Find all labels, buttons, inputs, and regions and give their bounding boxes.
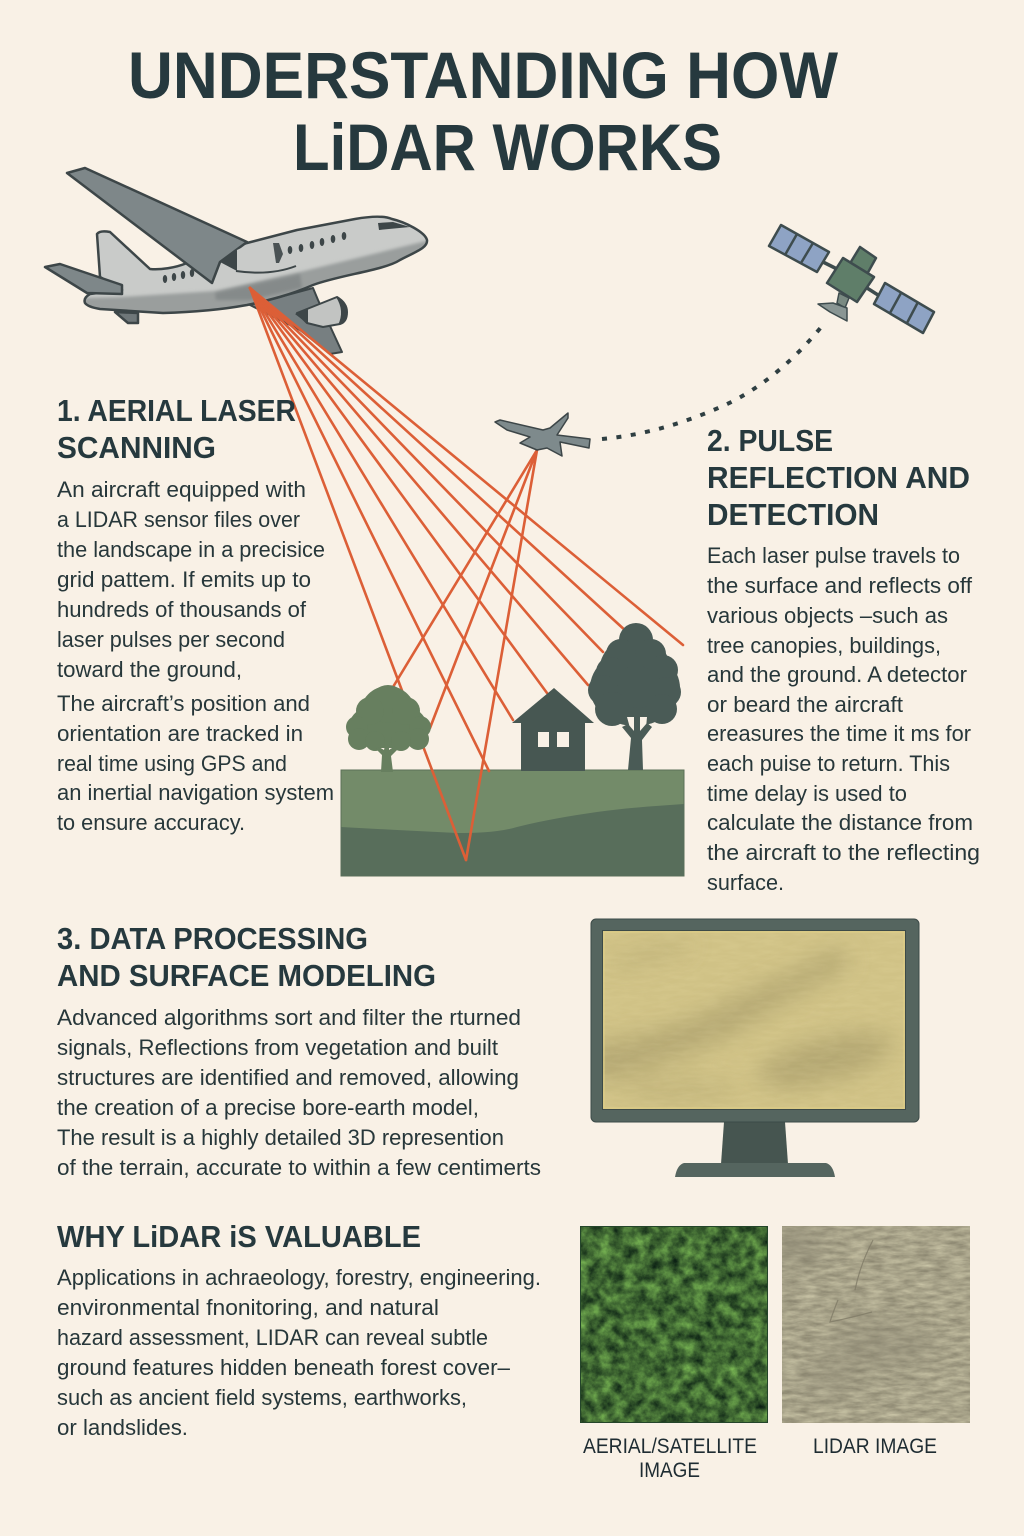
heading: pulse reflection and detection: DETECTION — [707, 497, 879, 532]
caption: aerial satellite image: IMAGE — [639, 1459, 700, 1482]
text block: pulse description: the surface and reflects off — [707, 573, 973, 598]
caption: aerial satellite image: AERIAL/SATELLITE — [583, 1435, 757, 1458]
text block: pulse description: Each laser pulse travels to — [707, 543, 960, 568]
text block: applications — [57, 1265, 541, 1440]
text block: applications: such as ancient field systems, earthworks, — [57, 1385, 467, 1410]
caption: lidar image: LIDAR IMAGE — [813, 1435, 937, 1458]
heading: pulse reflection and detection — [707, 423, 970, 532]
heading: why lidar is valuable: WHY LiDAR iS VALUABLE — [57, 1219, 421, 1254]
heading: data processing: AND SURFACE MODELING — [57, 958, 436, 993]
image: aerial satellite forest — [580, 1226, 768, 1423]
dotted signal path — [602, 321, 826, 439]
text block: data processing description: Advanced algorithms sort and filter the rturned — [57, 1005, 521, 1030]
text block: aircraft description: An aircraft equipped with — [57, 477, 306, 502]
panel: why lidar is valuable — [57, 1219, 541, 1440]
text block: pulse description: surface. — [707, 870, 784, 895]
text block: applications: Applications in achraeology, forestry, engineering. — [57, 1265, 541, 1290]
ground — [341, 770, 684, 876]
text block: aircraft description: real time using GPS and — [57, 751, 287, 776]
text block: aircraft description: orientation are tracked in — [57, 721, 303, 746]
text block: aircraft description — [57, 477, 334, 835]
laser beams — [250, 288, 683, 860]
panel: 1. aerial laser scanning — [57, 393, 334, 835]
text block: aircraft description: laser pulses per second — [57, 627, 285, 652]
text block: pulse description: and the ground. A detector — [707, 662, 967, 687]
text block: applications: or landslides. — [57, 1415, 188, 1440]
icon: small tree — [346, 685, 431, 772]
text block: pulse description: time delay is used to — [707, 781, 907, 806]
text block: data processing description: the creation of a precise bore-earth model, — [57, 1095, 479, 1120]
text block: pulse description: various objects –such as — [707, 603, 948, 628]
text block: pulse description: the aircraft to the reflecting — [707, 840, 980, 865]
text block: aircraft description: hundreds of thousands of — [57, 597, 307, 622]
text block: pulse description — [707, 543, 980, 895]
heading: aerial laser scanning: 1. AERIAL LASER — [57, 393, 296, 428]
heading: aerial laser scanning — [57, 393, 296, 465]
panel: 2. pulse reflection and detection — [707, 423, 980, 895]
text block: aircraft description: the landscape in a precisice — [57, 537, 325, 562]
text block: applications: ground features hidden beneath forest cover– — [57, 1355, 511, 1380]
text block: applications: environmental fnonitoring, and natural — [57, 1295, 439, 1320]
icon: computer monitor — [590, 919, 919, 1177]
caption: aerial satellite image — [583, 1435, 757, 1482]
heading: pulse reflection and detection: 2. PULSE — [707, 423, 833, 458]
text block: pulse description: each puise to return. This — [707, 751, 950, 776]
text block: aircraft description: toward the ground, — [57, 657, 242, 682]
text block: aircraft description: to ensure accuracy. — [57, 810, 245, 835]
icon: house — [512, 688, 594, 771]
text block: pulse description: or beard the aircraft — [707, 692, 903, 717]
text block: data processing description — [57, 1005, 541, 1180]
title: LiDAR WORKS — [293, 110, 722, 184]
text block: aircraft description: The aircraft’s position and — [57, 691, 310, 716]
text block: aircraft description: grid pattem. If emits up to — [57, 567, 311, 592]
text block: data processing description: signals, Reflections from vegetation and built — [57, 1035, 498, 1060]
text block: data processing description: of the terrain, accurate to within a few centimerts — [57, 1155, 541, 1180]
text block: data processing description: The result is a highly detailed 3D represention — [57, 1125, 504, 1150]
text block: data processing description: structures are identified and removed, allowing — [57, 1065, 519, 1090]
title: UNDERSTANDING HOW — [128, 38, 839, 112]
icon: satellite — [769, 225, 934, 333]
icon: small survey aircraft — [495, 413, 590, 456]
icon: large airplane — [45, 168, 430, 354]
text block: pulse description: tree canopies, buildings, — [707, 633, 941, 658]
title — [128, 38, 839, 184]
text block: aircraft description: an inertial navigation system — [57, 780, 334, 805]
text block: pulse description: calculate the distance from — [707, 810, 973, 835]
heading: data processing: 3. DATA PROCESSING — [57, 921, 368, 956]
text block: pulse description: ereasures the time it ms for — [707, 721, 971, 746]
image: lidar terrain — [770, 1220, 970, 1423]
text block: aircraft description: a LIDAR sensor files over — [57, 507, 300, 532]
heading: aerial laser scanning: SCANNING — [57, 430, 216, 465]
heading: pulse reflection and detection: REFLECTION AND — [707, 460, 970, 495]
text block: applications: hazard assessment, LIDAR can reveal subtle — [57, 1325, 488, 1350]
icon: large tree — [588, 623, 681, 770]
panel: 3. data processing and surface modeling — [57, 921, 541, 1180]
heading: data processing — [57, 921, 436, 993]
